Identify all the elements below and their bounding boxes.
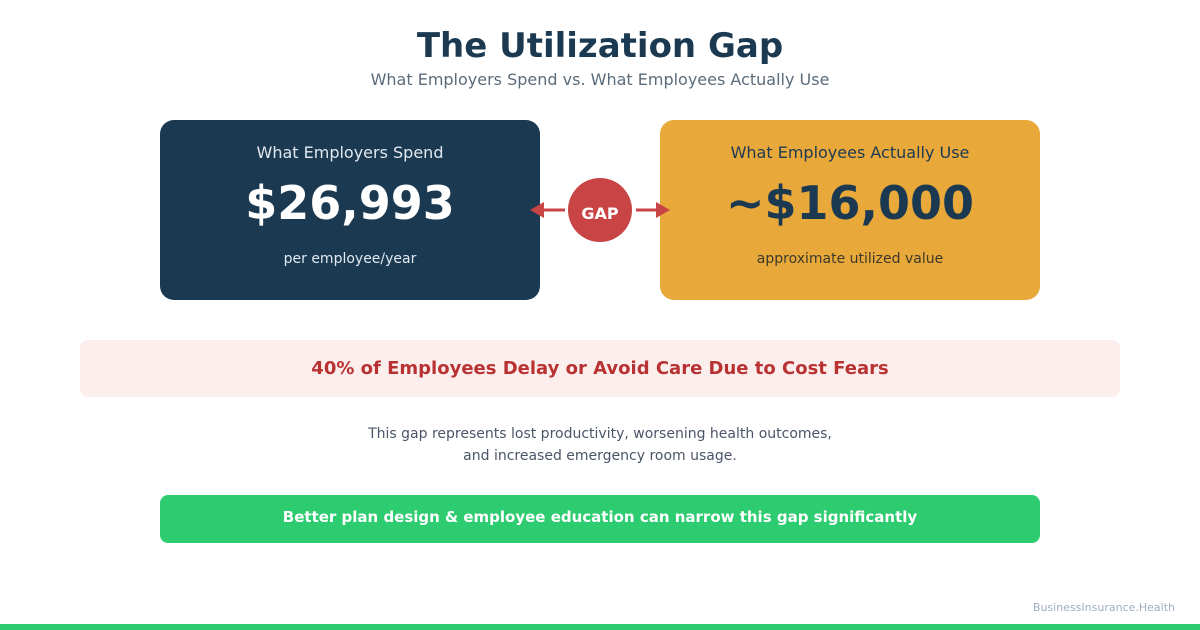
callout: delay care: 40% of Employees Delay or Avoid Care Due to Cost Fears: [311, 358, 889, 379]
panel: employee use: approximate utilized value: [757, 251, 943, 267]
text block: explanation: This gap represents lost productivity, worsening health outcomes,: [367, 426, 832, 442]
panel: employer spend: What Employers Spend: [257, 143, 443, 162]
arrow: left: [530, 202, 565, 218]
icon: gap circle: [568, 178, 632, 242]
icon: gap circle: GAP: [581, 204, 619, 223]
footer brand: BusinessInsurance.Health: [1033, 601, 1175, 614]
arrow: right: [636, 202, 670, 218]
panel: employee use: ~$16,000: [726, 176, 974, 230]
panel: employer spend: per employee/year: [284, 251, 417, 267]
text block: explanation: [367, 426, 832, 464]
panel: employer spend: [160, 120, 540, 300]
callout: recommendation: [160, 495, 1040, 543]
text block: explanation: and increased emergency room usage.: [463, 448, 737, 464]
panel: employer spend: $26,993: [245, 176, 455, 230]
panel: employee use: What Employees Actually Use: [731, 143, 969, 162]
callout: recommendation: Better plan design & employee education can narrow this gap significantly: [283, 508, 917, 526]
title: The Utilization Gap: [417, 26, 783, 66]
subtitle: What Employers Spend vs. What Employees Actually Use: [371, 70, 829, 89]
callout: delay care: [80, 340, 1120, 397]
panel: employee use: [660, 120, 1040, 300]
